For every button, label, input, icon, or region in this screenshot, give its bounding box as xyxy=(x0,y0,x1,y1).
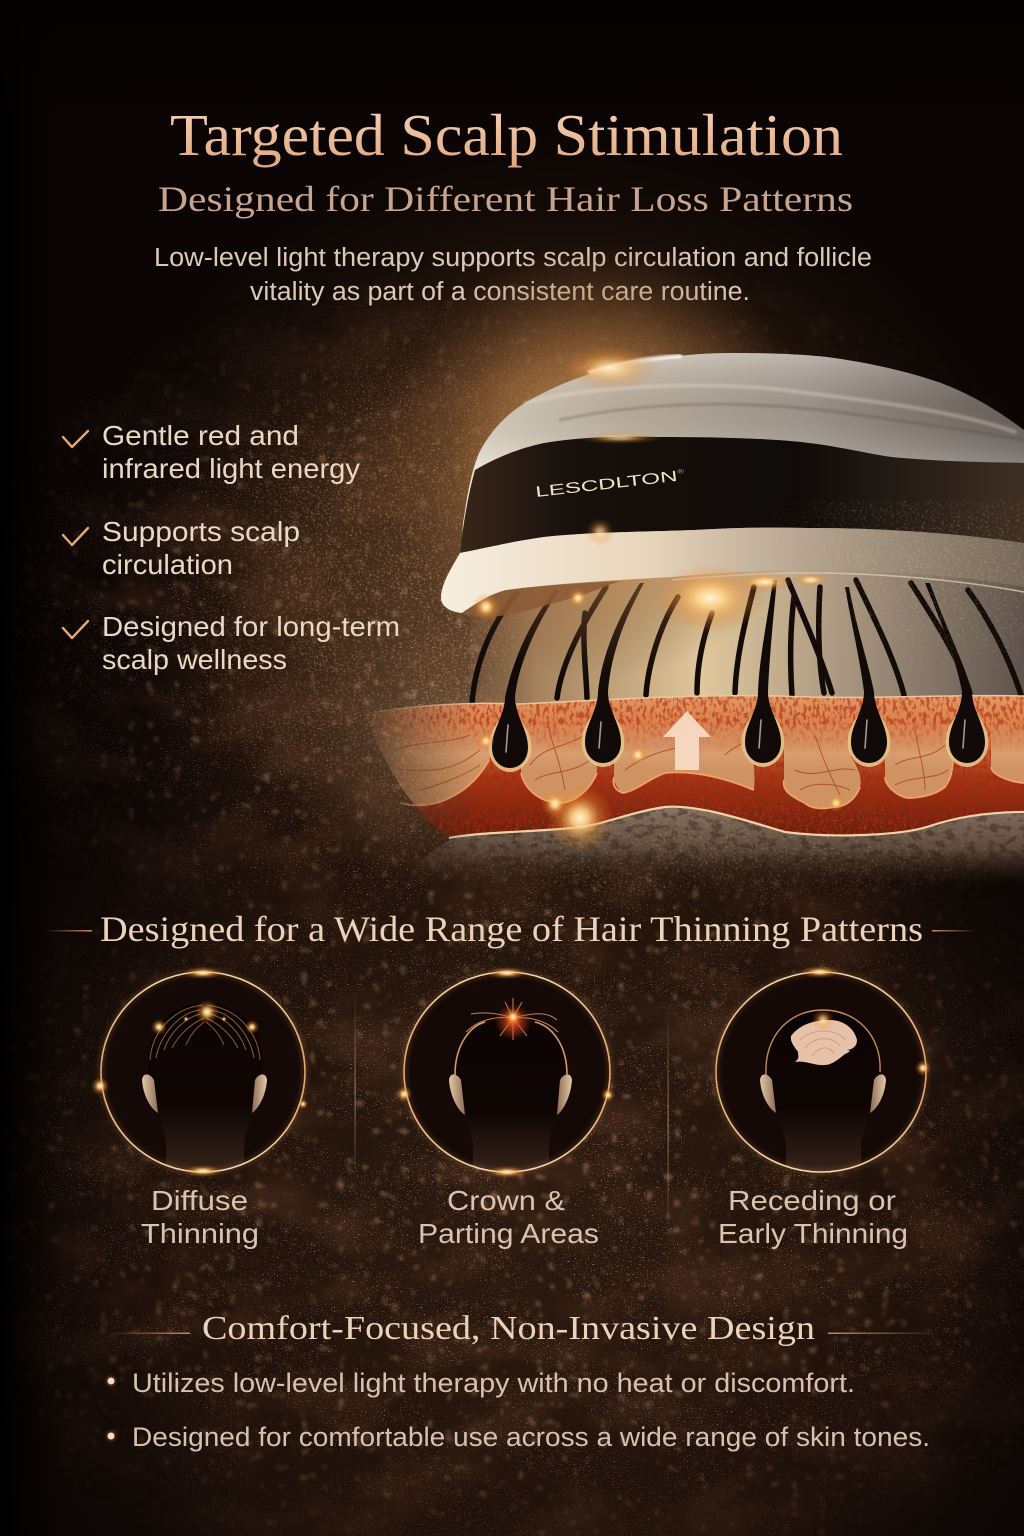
skin body xyxy=(365,696,1024,838)
benefit 1 xyxy=(63,420,360,484)
tissue contour lines xyxy=(449,807,1024,838)
follicle 3 xyxy=(742,580,784,767)
benefit 2: circulation xyxy=(102,549,233,580)
bullet 2: Designed for comfortable use across a wide range of skin tones. xyxy=(132,1422,930,1452)
pattern 2: crown and parting xyxy=(396,967,615,1249)
benefit 3 xyxy=(63,611,400,675)
label xyxy=(718,1185,908,1249)
brand mark: ® xyxy=(677,468,685,476)
label: Early Thinning xyxy=(718,1218,908,1249)
follicle 1 xyxy=(489,590,559,772)
light haze under device xyxy=(470,570,1024,705)
veins xyxy=(395,725,948,795)
label: Crown & xyxy=(447,1185,565,1216)
benefit 2: Supports scalp xyxy=(102,516,300,547)
benefit 1: Gentle red and xyxy=(102,420,299,451)
device helmet xyxy=(380,240,1024,900)
follicle 4 xyxy=(845,587,890,767)
shell crease highlights xyxy=(525,356,1024,440)
hero illustration: scalp cross-section xyxy=(365,570,1024,900)
label: Diffuse xyxy=(151,1185,248,1216)
label: Receding or xyxy=(728,1185,896,1216)
tissue sparkles xyxy=(477,732,845,852)
light sources xyxy=(472,346,829,632)
underside interior xyxy=(462,581,620,616)
brand mark: LESCDLTON xyxy=(535,474,625,501)
pattern 3: receding or early thinning xyxy=(716,966,931,1249)
subtitle: Designed for Different Hair Loss Patterns xyxy=(158,179,853,219)
label: Thinning xyxy=(141,1218,259,1249)
hood shell xyxy=(460,353,1024,553)
device glow xyxy=(380,240,820,680)
icon: head with diffuse thinning xyxy=(91,967,308,1177)
intro text: Low-level light therapy supports scalp circulation and follicle xyxy=(154,244,872,272)
arrow up xyxy=(663,711,711,770)
benefits checklist xyxy=(63,420,400,675)
icon: head with crown glow xyxy=(396,967,615,1178)
rim lip xyxy=(672,573,1024,592)
label xyxy=(141,1185,259,1249)
benefit 2 xyxy=(63,516,300,580)
bullet list xyxy=(104,1368,930,1452)
benefit 3: Designed for long-term xyxy=(102,611,400,642)
lower rim xyxy=(441,528,1024,613)
tan pockets xyxy=(365,720,1024,808)
scalp tissue layers xyxy=(365,694,1024,900)
benefit 3: scalp wellness xyxy=(102,644,287,675)
column dividers xyxy=(354,990,669,1245)
label: Parting Areas xyxy=(418,1218,599,1249)
tissue texture xyxy=(365,694,1024,840)
section heading: comfort: Comfort-Focused, Non-Invasive Design xyxy=(202,1310,815,1347)
lower tissue xyxy=(412,808,1024,882)
device dust xyxy=(400,500,1024,900)
follicle 2 xyxy=(582,583,644,767)
intro text xyxy=(154,244,872,306)
benefit 1: infrared light energy xyxy=(102,453,360,484)
section heading: thinning patterns: Designed for a Wide Range of Hair Thinning Patterns xyxy=(100,909,923,949)
intro text: vitality as part of a consistent care routine. xyxy=(250,278,750,306)
bulb highlights xyxy=(506,720,965,752)
black band xyxy=(460,437,1024,553)
title: Targeted Scalp Stimulation xyxy=(170,102,843,168)
icon: head with bald patch xyxy=(716,966,931,1175)
pattern 1: diffuse thinning xyxy=(91,967,308,1249)
pocket outlines xyxy=(400,760,1024,808)
bullet 1: Utilizes low-level light therapy with no heat or discomfort. xyxy=(132,1368,855,1398)
background hair strands xyxy=(472,580,1021,703)
label xyxy=(418,1185,599,1249)
follicle 5 xyxy=(925,583,988,767)
